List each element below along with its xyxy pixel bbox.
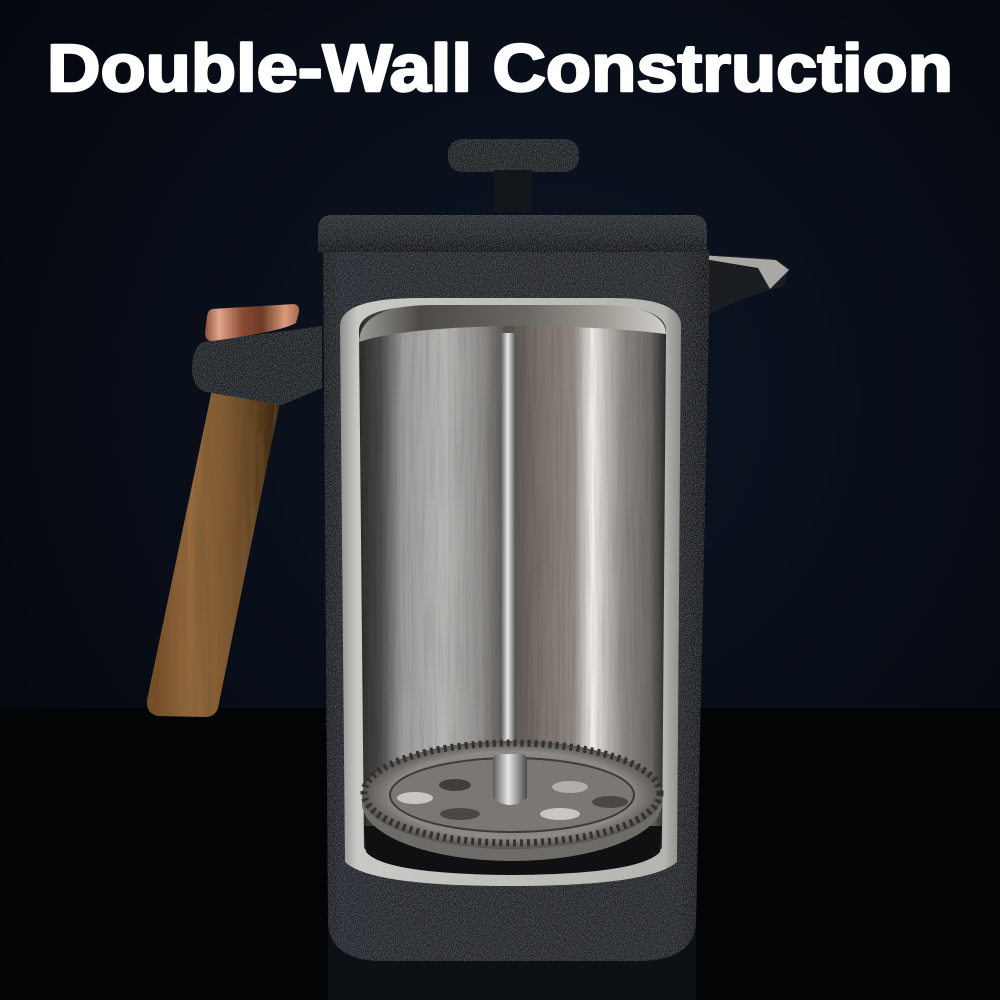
knob [448,139,579,212]
plunger rod [501,333,516,763]
handle [147,304,322,717]
cutaway inner cavity [359,306,666,874]
main body [323,250,709,961]
filter hub [493,754,527,805]
filter plate [362,741,662,861]
wood grip [147,385,282,717]
lid [318,215,707,252]
cutaway outer wall [340,298,681,886]
copper cap [205,304,299,341]
bottom dark cavity [364,826,662,875]
inner rim highlight [359,305,666,342]
french press [147,139,790,1000]
title: Double-Wall Construction [47,31,953,106]
pour spout [655,252,790,318]
handle bracket [192,326,322,405]
reflection [328,930,696,1000]
